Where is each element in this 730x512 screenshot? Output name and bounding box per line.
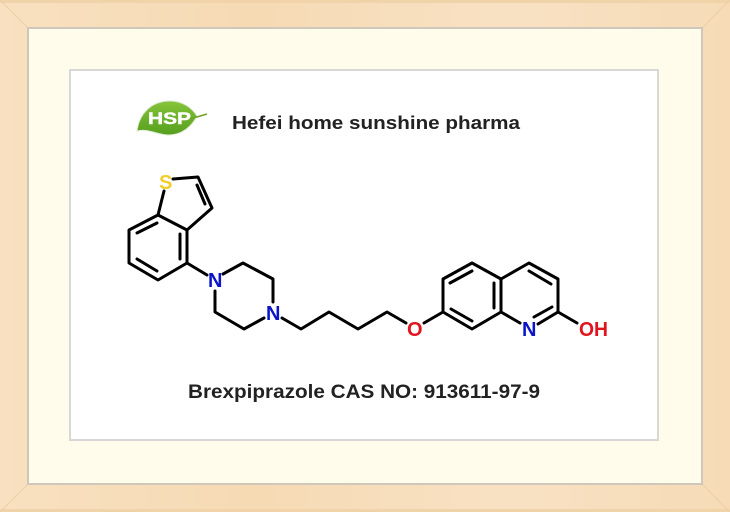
atom label: O: O bbox=[407, 319, 423, 341]
atom label: N: N bbox=[522, 319, 536, 341]
atom label: N: N bbox=[266, 303, 280, 325]
atom label: S: S bbox=[159, 172, 172, 194]
bonds bbox=[129, 177, 577, 329]
white panel bbox=[69, 69, 659, 441]
logo: HSP leaf bbox=[137, 101, 207, 135]
chemical structure: brexpiprazole bbox=[129, 172, 608, 341]
atom label: OH: OH bbox=[579, 319, 608, 341]
logo: HSP leaf: HSP bbox=[148, 109, 191, 128]
heading: company name: Hefei home sunshine pharma bbox=[232, 112, 521, 133]
caption: compound name and CAS number: Brexpiprazole CAS NO: 913611-97-9 bbox=[188, 382, 540, 403]
atom label: N: N bbox=[208, 270, 222, 292]
